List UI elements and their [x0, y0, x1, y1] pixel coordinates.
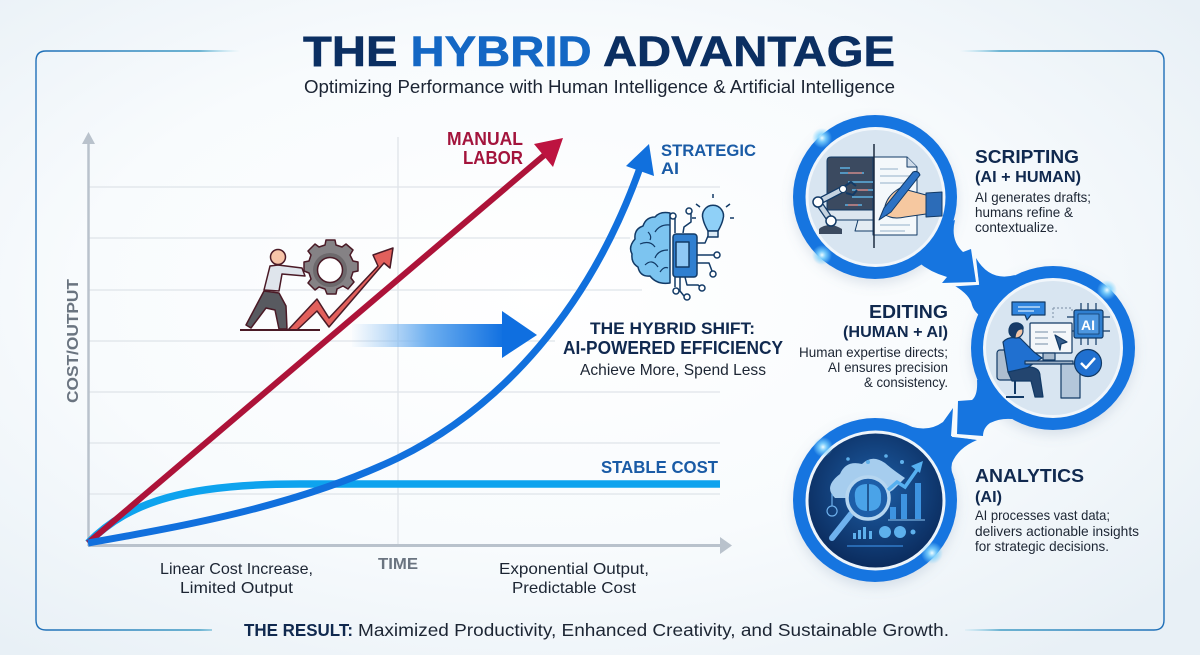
result line: THE RESULT: [244, 620, 353, 640]
connector gaps [952, 255, 980, 439]
y axis [82, 132, 95, 546]
scripting description: AI generates drafts; [975, 189, 1091, 205]
analytics description: for strategic decisions. [975, 538, 1109, 554]
icon: analytics [827, 454, 925, 546]
editing subheading: (HUMAN + AI) [843, 324, 948, 341]
chip label: AI [1081, 317, 1095, 333]
scripting text block [975, 146, 1091, 235]
icon: robot arm and hand writing [813, 144, 942, 248]
efficiency heading: AI-POWERED EFFICIENCY [563, 338, 783, 358]
circle: scripting [793, 115, 976, 283]
circle: analytics [793, 408, 977, 582]
scripting description: contextualize. [975, 219, 1058, 235]
circle: editing [955, 258, 1135, 436]
caption: exponential output: Exponential Output, [499, 561, 649, 578]
strategic AI arrow [88, 144, 654, 543]
editing description: AI ensures precision [828, 359, 948, 375]
editing heading: EDITING [869, 301, 948, 322]
subtitle: Optimizing Performance with Human Intelligence & Artificial Intelligence [304, 76, 895, 97]
caption: linear cost: Limited Output [180, 580, 294, 597]
editing text block [799, 301, 948, 390]
stable cost label: STABLE COST [601, 457, 718, 477]
hybrid shift arrow [352, 311, 537, 358]
icon: editor at workstation [997, 302, 1110, 398]
analytics text block [975, 465, 1139, 554]
manual labor label: LABOR [463, 148, 523, 168]
analytics heading: ANALYTICS [975, 465, 1084, 486]
y axis label: COST/OUTPUT [65, 279, 82, 403]
caption: linear cost: Linear Cost Increase, [160, 561, 313, 578]
x axis [88, 537, 732, 554]
caption: exponential output: Predictable Cost [512, 580, 637, 597]
chart: cost vs output [65, 129, 756, 573]
editing description: Human expertise directs; [799, 344, 948, 360]
editing description: & consistency. [864, 374, 948, 390]
hybrid shift heading: THE HYBRID SHIFT: [590, 319, 755, 338]
icon: brain, chip and bulb [631, 194, 734, 300]
arrow: scripting to editing [918, 220, 976, 283]
result line: Maximized Productivity, Enhanced Creativity, and Sustainable Growth. [358, 620, 949, 640]
analytics description: delivers actionable insights [975, 523, 1139, 539]
hybrid shift text block [563, 319, 783, 379]
manual labor label: MANUAL [447, 129, 523, 149]
strategic AI label: AI [661, 159, 679, 178]
scripting subheading: (AI + HUMAN) [975, 169, 1081, 186]
arrow: editing to analytics [957, 380, 1012, 436]
title: THE HYBRID ADVANTAGE [303, 28, 895, 76]
icon: worker pushing gear [240, 240, 393, 330]
analytics description: AI processes vast data; [975, 507, 1110, 523]
manual labor arrow [88, 138, 563, 543]
scripting heading: SCRIPTING [975, 146, 1079, 167]
analytics subheading: (AI) [975, 489, 1002, 506]
stable cost line [88, 484, 720, 543]
strategic AI label: STRATEGIC [661, 141, 756, 160]
scripting description: humans refine & [975, 204, 1074, 220]
tagline: Achieve More, Spend Less [580, 362, 766, 379]
x axis label: TIME [378, 556, 418, 573]
